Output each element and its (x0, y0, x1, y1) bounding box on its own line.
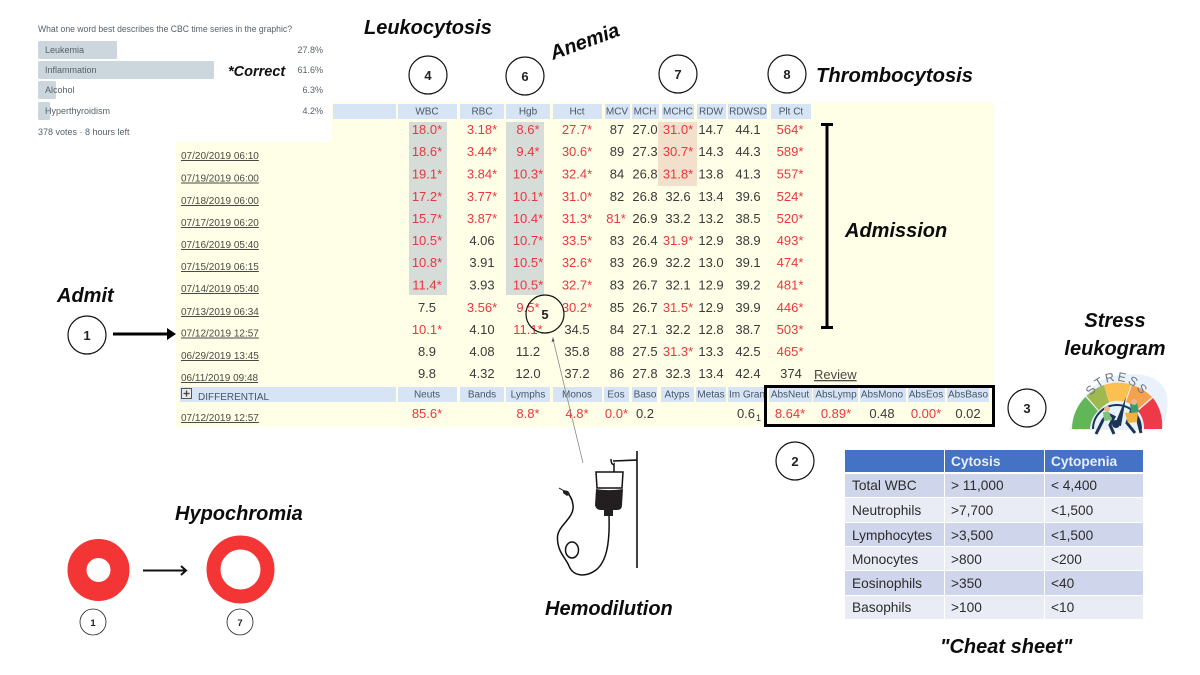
number badge 8: 8 (783, 67, 791, 82)
number badge 7 (659, 55, 697, 93)
row: 07/17/2019: 38.5 (735, 211, 761, 226)
row: 07/19/2019: 13.8 (698, 166, 724, 182)
row: 07/20/2019: 30.7* (663, 144, 693, 159)
row: 06/11/2019: 06/11/2019 09:48 (181, 373, 259, 384)
icon: stress gauge (1069, 372, 1168, 435)
row: 07/17/2019: 15.7* (412, 211, 442, 226)
row: 06/29/2019: 88 (610, 344, 624, 359)
differential header row: Bands (468, 390, 496, 400)
row: 07/12/2019: 10.1* (412, 322, 442, 337)
row: 07/16/2019 (181, 233, 803, 251)
row: 07/13/2019: 30.2* (562, 300, 592, 315)
row: Monocytes (845, 547, 1143, 570)
row: 07/12/2019: 27.1 (632, 322, 658, 337)
differential values row: 0.02 (955, 406, 981, 421)
row: 06/11/2019: 4.32 (469, 366, 495, 381)
row: 07/13/2019: 446* (777, 300, 803, 315)
row: 07/16/2019: 38.9 (735, 233, 761, 248)
number badge 3: 3 (1023, 401, 1031, 416)
icon: normal red cell (77, 548, 120, 592)
row: 07/14/2019: 32.7* (562, 278, 592, 292)
row: 07/18/2019: 10.1* (513, 189, 543, 204)
row: 07/14/2019: 83 (610, 278, 624, 292)
row: Eosinophils (845, 571, 1143, 595)
row: 07/15/2019: 10.8* (412, 255, 442, 270)
row: 07/12/2019: 84 (610, 322, 624, 337)
differential values row: 07/12/2019 12:57 (181, 413, 259, 424)
row: 07/20/2019 (181, 144, 803, 162)
table header: Cytopenia (1051, 454, 1118, 469)
row: 06/29/2019: 4.08 (469, 344, 495, 359)
row: 07/16/2019: 31.9* (663, 233, 693, 248)
row: 07/13/2019: 9.5* (516, 300, 540, 315)
row: 07/15/2019: 474* (777, 255, 803, 270)
row: 07/15/2019: 13.0 (698, 255, 724, 270)
row: 07/15/2019 (181, 255, 803, 273)
heading: Admit: Admit (56, 285, 115, 307)
panel: poll (0, 0, 332, 142)
poll question: What one word best describes the CBC time series in the graphic? (38, 24, 292, 35)
row: Eosinophils: >350 (951, 576, 982, 591)
differential values row: 0.48 (869, 406, 895, 421)
row: 07/17/2019: 26.9 (632, 211, 658, 226)
row: 07/13/2019: 85 (610, 300, 624, 315)
row: 06/29/2019: 13.3 (698, 344, 724, 359)
row: 07/12/2019: 07/12/2019 12:57 (181, 328, 259, 340)
differential header row: Im Gran (729, 390, 765, 400)
differential values row: 8.8* (516, 406, 540, 421)
row: 07/16/2019: 12.9 (698, 233, 724, 248)
row: 06/11/2019: 37.2 (564, 366, 590, 381)
row: 06/11/2019: 13.4 (698, 366, 724, 381)
row: 07/18/2019: 17.2* (412, 189, 442, 204)
row: 06/29/2019: 31.3* (663, 344, 693, 359)
differential header row: Eos (607, 390, 625, 400)
differential header row: AbsBaso (948, 390, 988, 400)
table header row (333, 104, 811, 119)
poll bar: Hyperthyroidism (38, 102, 323, 120)
number badge 6: 6 (521, 69, 529, 84)
row: Basophils: >100 (951, 600, 982, 615)
row: 06/29/2019 (181, 344, 803, 362)
row: 07/19/2019: 41.3 (735, 166, 761, 182)
row: 07/19/2019: 557* (777, 166, 803, 182)
row: Total WBC: > 11,000 (951, 478, 1004, 493)
row: 07/15/2019: 32.6* (562, 255, 592, 270)
row: 07/17/2019: 3.87* (467, 211, 497, 226)
row: 07/15/2019: 39.1 (735, 255, 761, 270)
differential header row (180, 387, 989, 403)
row: Eosinophils: Eosinophils (852, 576, 922, 591)
badge: day 1: 1 (90, 618, 96, 629)
row: 07/16/2019: 26.4 (632, 233, 658, 248)
poll footer: 378 votes · 8 hours left (38, 127, 130, 137)
panel: cheat sheet table (845, 450, 1143, 619)
row: 07/12/2019: 503* (777, 322, 803, 337)
row: 07/20/2019: 3.44* (467, 144, 497, 159)
number badge 2: 2 (791, 454, 799, 469)
differential header row: AbsEos (909, 390, 943, 400)
arrow: cell change (143, 566, 186, 575)
row: 07/14/2019: 10.5* (513, 278, 543, 292)
row: most recent: 18.0* (412, 122, 442, 137)
row: 07/12/2019: 32.2 (665, 322, 691, 337)
row: 07/17/2019: 81* (606, 211, 626, 226)
row: 06/11/2019: 27.8 (632, 366, 658, 381)
table header: Cytosis (951, 454, 1001, 469)
poll bar: Leukemia: Leukemia (45, 45, 84, 55)
table header row: MCHC (663, 106, 693, 118)
number badge 4: 4 (424, 68, 432, 83)
row: most recent: 564* (777, 122, 803, 137)
row: 07/20/2019: 27.3 (632, 144, 658, 159)
row: 07/18/2019: 32.6 (665, 189, 691, 204)
row: 07/17/2019: 13.2 (698, 211, 724, 226)
row: most recent (412, 122, 803, 137)
row: 07/19/2019 (181, 166, 803, 184)
correct answer label: *Correct (228, 64, 286, 80)
row: 07/19/2019: 84 (610, 166, 624, 182)
row: 07/17/2019: 33.2 (665, 211, 691, 226)
row: 07/12/2019: 38.7 (735, 322, 761, 337)
differential values row: 4.8* (565, 406, 589, 421)
number badge 1: 1 (83, 328, 91, 343)
poll bar: Inflammation: Inflammation (45, 65, 97, 75)
number badge 6 (506, 57, 544, 95)
heading: Admission: Admission (844, 220, 947, 242)
row: 07/18/2019: 524* (777, 189, 803, 204)
heading: Leukocytosis: Leukocytosis (364, 17, 492, 39)
row: 06/29/2019: 06/29/2019 13:45 (181, 351, 259, 362)
differential header row: AbsLymp (815, 390, 857, 400)
row: Neutrophils (845, 498, 1143, 522)
row: 07/18/2019: 31.0* (562, 189, 592, 204)
row: 07/13/2019: 07/13/2019 06:34 (181, 307, 259, 318)
differential header row: AbsMono (861, 390, 904, 400)
row: most recent: 27.0 (632, 122, 658, 137)
row: 07/16/2019: 10.7* (513, 233, 543, 248)
row: 07/18/2019: 82 (610, 189, 624, 204)
row: 07/15/2019: 83 (610, 255, 624, 270)
table header row: MCH (634, 106, 656, 118)
heading: Anemia: Anemia (546, 19, 623, 65)
badge: day 7: 7 (237, 618, 243, 629)
row: 07/19/2019: 07/19/2019 06:00 (181, 174, 259, 184)
panel: CBC results table (176, 102, 994, 427)
row: 07/13/2019: 31.5* (663, 300, 693, 315)
row: 06/11/2019: 32.3 (665, 366, 691, 381)
bracket: admission span (821, 124, 833, 328)
row: Lymphocytes: <1,500 (1051, 528, 1094, 543)
row: 07/20/2019: 30.6* (562, 144, 592, 159)
heading: Stress leukogram (1064, 310, 1166, 360)
row: 06/29/2019: 465* (777, 344, 803, 359)
differential values row: 8.64* (775, 406, 805, 421)
highlight: WBC column (409, 122, 447, 295)
row: Monocytes: Monocytes (852, 552, 918, 567)
row: 07/15/2019: 32.2 (665, 255, 691, 270)
row: 06/11/2019: 42.4 (735, 366, 761, 381)
differential header row: Atyps (664, 390, 690, 400)
row: 06/11/2019: 374 (780, 366, 802, 381)
poll bar: Alcohol (38, 81, 323, 99)
poll bar: Hyperthyroidism: 4.2% (302, 106, 323, 116)
row: 07/20/2019: 589* (777, 144, 803, 159)
table header row: RBC (471, 106, 493, 118)
row: 07/15/2019: 10.5* (513, 255, 543, 270)
poll bar: Alcohol: Alcohol (45, 85, 75, 95)
row: 07/13/2019: 7.5 (418, 300, 436, 315)
differential header row: Monos (562, 390, 592, 400)
row: Total WBC: Total WBC (852, 478, 917, 493)
number badge 7: 7 (674, 67, 682, 82)
row: 07/17/2019: 520* (777, 211, 803, 226)
icon: IV drip (557, 451, 637, 575)
row: 07/20/2019: 89 (610, 144, 624, 159)
row: 07/14/2019: 481* (777, 278, 803, 292)
row: 07/18/2019: 07/18/2019 06:00 (181, 196, 259, 207)
row: 07/20/2019: 14.3 (698, 144, 724, 159)
row: 07/12/2019 (181, 322, 803, 340)
row: 07/17/2019: 07/17/2019 06:20 (181, 218, 259, 229)
row: 07/13/2019: 26.7 (632, 300, 658, 315)
heading: Cheat sheet: "Cheat sheet" (940, 636, 1073, 658)
row: 07/19/2019: 10.3* (513, 166, 543, 182)
row: Neutrophils: Neutrophils (852, 503, 921, 518)
row: 07/14/2019: 07/14/2019 05:40 (181, 284, 259, 295)
row: 07/12/2019: 34.5 (564, 322, 590, 337)
differential values row: 0.2 (636, 406, 654, 421)
number badge 2 (776, 442, 814, 480)
differential header row: DIFFERENTIAL (198, 392, 270, 403)
heading: Hemodilution: Hemodilution (545, 598, 673, 620)
row: most recent: 3.18* (467, 122, 497, 137)
row: 07/20/2019: 44.3 (735, 144, 761, 159)
table header row: Hgb (519, 106, 538, 118)
poll bar: Leukemia: 27.8% (297, 45, 323, 55)
table header row: WBC (415, 106, 439, 118)
row: Neutrophils: <1,500 (1051, 503, 1094, 518)
row: 06/11/2019 (181, 366, 802, 384)
row: Basophils: Basophils (852, 600, 912, 615)
heading: Stress leukogram: leukogram (1064, 338, 1166, 360)
highlight: MCHC values (658, 122, 697, 186)
table header row: Hct (570, 106, 585, 118)
poll bar: Hyperthyroidism: Hyperthyroidism (45, 106, 110, 116)
review link: Review (814, 367, 857, 382)
number badge 4 (409, 56, 447, 94)
row: 07/19/2019: 19.1* (412, 166, 442, 182)
box: absolute differential (766, 386, 994, 426)
row: Total WBC (845, 474, 1143, 497)
differential header row: AbsNeut (771, 390, 809, 400)
poll bar: Inflammation: 61.6% (297, 65, 323, 75)
heading: Hypochromia: Hypochromia (175, 503, 303, 525)
row: 06/29/2019: 35.8 (564, 344, 590, 359)
row: 06/29/2019: 42.5 (735, 344, 761, 359)
row: Eosinophils: <40 (1051, 576, 1075, 591)
table header (845, 450, 1143, 472)
row: 07/14/2019: 3.93 (469, 278, 495, 292)
row: most recent: 31.0* (663, 122, 693, 137)
table header row: RDW (699, 106, 723, 118)
row: 07/12/2019: 12.8 (698, 322, 724, 337)
highlight: Hgb column (506, 122, 544, 295)
row: 07/15/2019: 3.91 (469, 255, 495, 270)
row: most recent: 8.6* (516, 122, 540, 137)
row: Basophils: <10 (1051, 600, 1075, 615)
heading: Thrombocytosis: Thrombocytosis (816, 65, 973, 87)
differential header row: Baso (634, 390, 657, 400)
row: 06/29/2019: 11.2 (516, 344, 540, 359)
differential header row: Neuts (414, 390, 440, 400)
row: 07/16/2019: 33.5* (562, 233, 592, 248)
row: Total WBC: < 4,400 (1051, 478, 1097, 493)
row: 07/16/2019: 83 (610, 233, 624, 248)
row: 07/15/2019: 26.9 (632, 255, 658, 270)
row: 07/19/2019: 3.84* (467, 166, 497, 182)
row: most recent: 87 (610, 122, 624, 137)
row: 07/19/2019: 31.8* (663, 166, 693, 182)
differential values row: 0.0* (605, 406, 628, 421)
row: 07/17/2019 (181, 211, 803, 229)
number badge 5 (526, 295, 564, 333)
row: 07/14/2019: 32.1 (665, 278, 691, 292)
row: 07/19/2019: 32.4* (562, 166, 592, 182)
row: 07/14/2019: 26.7 (632, 278, 658, 292)
row: 06/29/2019: 27.5 (632, 344, 658, 359)
gauge label: STRESS (1086, 372, 1146, 394)
row: 06/29/2019: 8.9 (418, 344, 436, 359)
row: 07/12/2019: 11.1* (513, 322, 543, 337)
number badge 1 (68, 316, 106, 354)
table header row: RDWSD (729, 106, 767, 118)
row: Lymphocytes: >3,500 (951, 528, 994, 543)
arrow: admit row (113, 328, 176, 340)
row: 07/13/2019: 12.9 (698, 300, 724, 315)
number badge 8 (768, 55, 806, 93)
number badge 5: 5 (541, 307, 549, 322)
row: Lymphocytes (845, 523, 1143, 546)
row: 07/16/2019: 07/16/2019 05:40 (181, 240, 259, 251)
row: 07/14/2019: 39.2 (735, 278, 761, 292)
arrow: hemodilution pointer (552, 337, 583, 463)
differential values row: 0.00* (911, 406, 941, 421)
differential values row: 85.6* (412, 406, 442, 421)
row: 07/16/2019: 10.5* (412, 233, 442, 248)
heading: Stress leukogram: Stress (1084, 310, 1146, 332)
poll bar: Alcohol: 6.3% (302, 85, 323, 95)
row: 07/18/2019: 39.6 (735, 189, 761, 204)
row: most recent: 14.7 (698, 122, 724, 137)
row: 07/19/2019: 26.8 (632, 166, 658, 182)
differential header row: Lymphs (511, 390, 545, 400)
row: 07/18/2019: 26.8 (632, 189, 658, 204)
row: 07/13/2019: 39.9 (735, 300, 761, 315)
row: 07/17/2019: 31.3* (562, 211, 592, 226)
row: 06/11/2019: 12.0 (515, 366, 541, 381)
row: 07/14/2019 (181, 278, 803, 295)
row: 07/20/2019: 18.6* (412, 144, 442, 159)
row: 07/12/2019: 4.10 (469, 322, 495, 337)
row: 07/16/2019: 4.06 (469, 233, 495, 248)
badge: day 7 (227, 609, 253, 635)
row: 06/11/2019: 86 (610, 366, 624, 381)
row: 07/20/2019: 9.4* (516, 144, 540, 159)
row: Monocytes: <200 (1051, 552, 1082, 567)
differential values row: 0.6 (737, 406, 755, 421)
row: 07/17/2019: 10.4* (513, 211, 543, 226)
differential values row: 1 (756, 413, 761, 423)
differential values row (181, 406, 981, 424)
row: 07/18/2019: 3.77* (467, 189, 497, 204)
row: Lymphocytes: Lymphocytes (852, 528, 932, 543)
row: 07/20/2019: 07/20/2019 06:10 (181, 151, 259, 162)
icon: hypochromic red cell (214, 542, 268, 596)
row: Basophils (845, 596, 1143, 619)
badge: day 1 (80, 609, 106, 635)
row: 07/13/2019: 3.56* (467, 300, 497, 315)
row: 07/16/2019: 493* (777, 233, 803, 248)
row: 07/15/2019: 07/15/2019 06:15 (181, 262, 259, 273)
row: Neutrophils: >7,700 (951, 503, 994, 518)
table header row: Plt Ct (779, 106, 803, 118)
differential header row: Metas (697, 390, 725, 400)
row: 07/13/2019 (181, 300, 803, 318)
row: most recent: 44.1 (735, 122, 761, 137)
poll bar: Leukemia (38, 41, 323, 59)
table header row: MCV (606, 106, 628, 118)
row: 07/18/2019: 13.4 (698, 189, 724, 204)
row: Monocytes: >800 (951, 552, 982, 567)
row: most recent: 27.7* (562, 122, 592, 137)
poll bar: Inflammation (38, 61, 323, 79)
row: 07/14/2019: 12.9 (698, 278, 724, 292)
differential values row: 0.89* (821, 406, 851, 421)
row: 07/18/2019 (181, 189, 803, 207)
row: 06/11/2019: 9.8 (418, 366, 436, 381)
row: 07/14/2019: 11.4* (412, 278, 442, 292)
number badge 3 (1008, 389, 1046, 427)
